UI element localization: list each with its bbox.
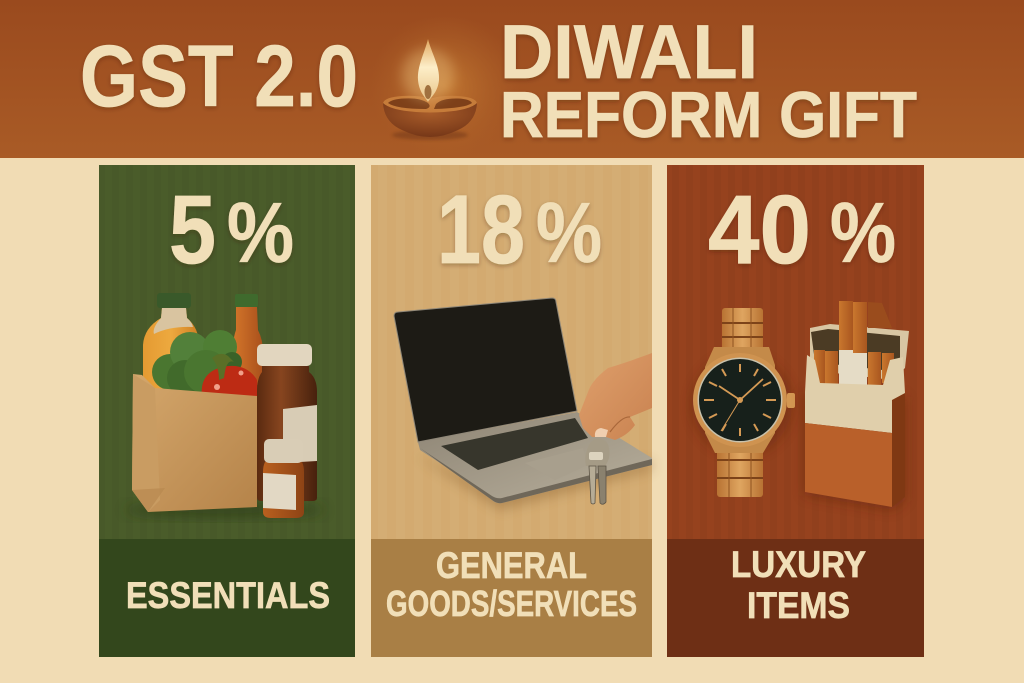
pack sides xyxy=(892,393,905,507)
tall cigarettes xyxy=(839,301,853,361)
illustration: laptop and keys xyxy=(394,298,652,510)
label: GENERAL: GENERAL xyxy=(436,545,587,586)
trackpad xyxy=(525,448,588,480)
panel: luxury 40% xyxy=(667,165,924,657)
title: DIWALI: DIWALI xyxy=(500,10,758,95)
lid xyxy=(810,324,909,380)
hand xyxy=(579,353,652,440)
label: ITEMS: ITEMS xyxy=(747,585,850,626)
label: GOODS/SERVICES: GOODS/SERVICES xyxy=(386,583,637,624)
rate: 40% xyxy=(708,175,896,284)
pepper xyxy=(202,354,258,400)
laptop screen xyxy=(394,298,577,442)
short cigarettes xyxy=(814,350,825,388)
pack front orange xyxy=(805,423,892,507)
title: GST 2.0: GST 2.0 xyxy=(80,28,358,125)
illustration: watch xyxy=(692,308,795,497)
small jar xyxy=(263,462,304,518)
paper bag xyxy=(132,374,257,512)
footer: general goods xyxy=(371,539,652,657)
keyboard xyxy=(441,418,588,470)
rate: 40%: % xyxy=(830,186,896,281)
rate: 18% xyxy=(437,175,602,284)
sauce bottle xyxy=(233,307,263,385)
icon: diya lamp xyxy=(383,39,477,140)
illustration: groceries and medicine xyxy=(125,293,325,518)
large amber jar xyxy=(257,366,317,501)
footer: essentials xyxy=(99,539,355,657)
laptop base xyxy=(418,412,652,503)
title: REFORM GIFT: REFORM GIFT xyxy=(500,78,917,151)
label: ESSENTIALS: ESSENTIALS xyxy=(126,575,330,616)
rate: 18%: 18 xyxy=(437,175,525,284)
panel: general goods 18% xyxy=(371,165,652,657)
rate: 40%: 40 xyxy=(708,175,811,284)
footer: luxury xyxy=(667,539,924,657)
illustration: cigarette pack xyxy=(805,301,909,510)
rate: 5%: 5 xyxy=(169,175,216,284)
back flap xyxy=(868,302,892,328)
header banner xyxy=(0,0,1024,158)
label: LUXURY: LUXURY xyxy=(731,544,866,585)
rate: 5%: % xyxy=(227,186,294,281)
juice bottle xyxy=(143,308,199,400)
rate: 5% xyxy=(169,175,294,284)
rate: 18%: % xyxy=(536,186,602,281)
broccoli xyxy=(152,330,242,396)
pack front cream xyxy=(805,355,905,433)
panel: essentials 5% xyxy=(99,165,355,657)
keys xyxy=(585,439,610,504)
